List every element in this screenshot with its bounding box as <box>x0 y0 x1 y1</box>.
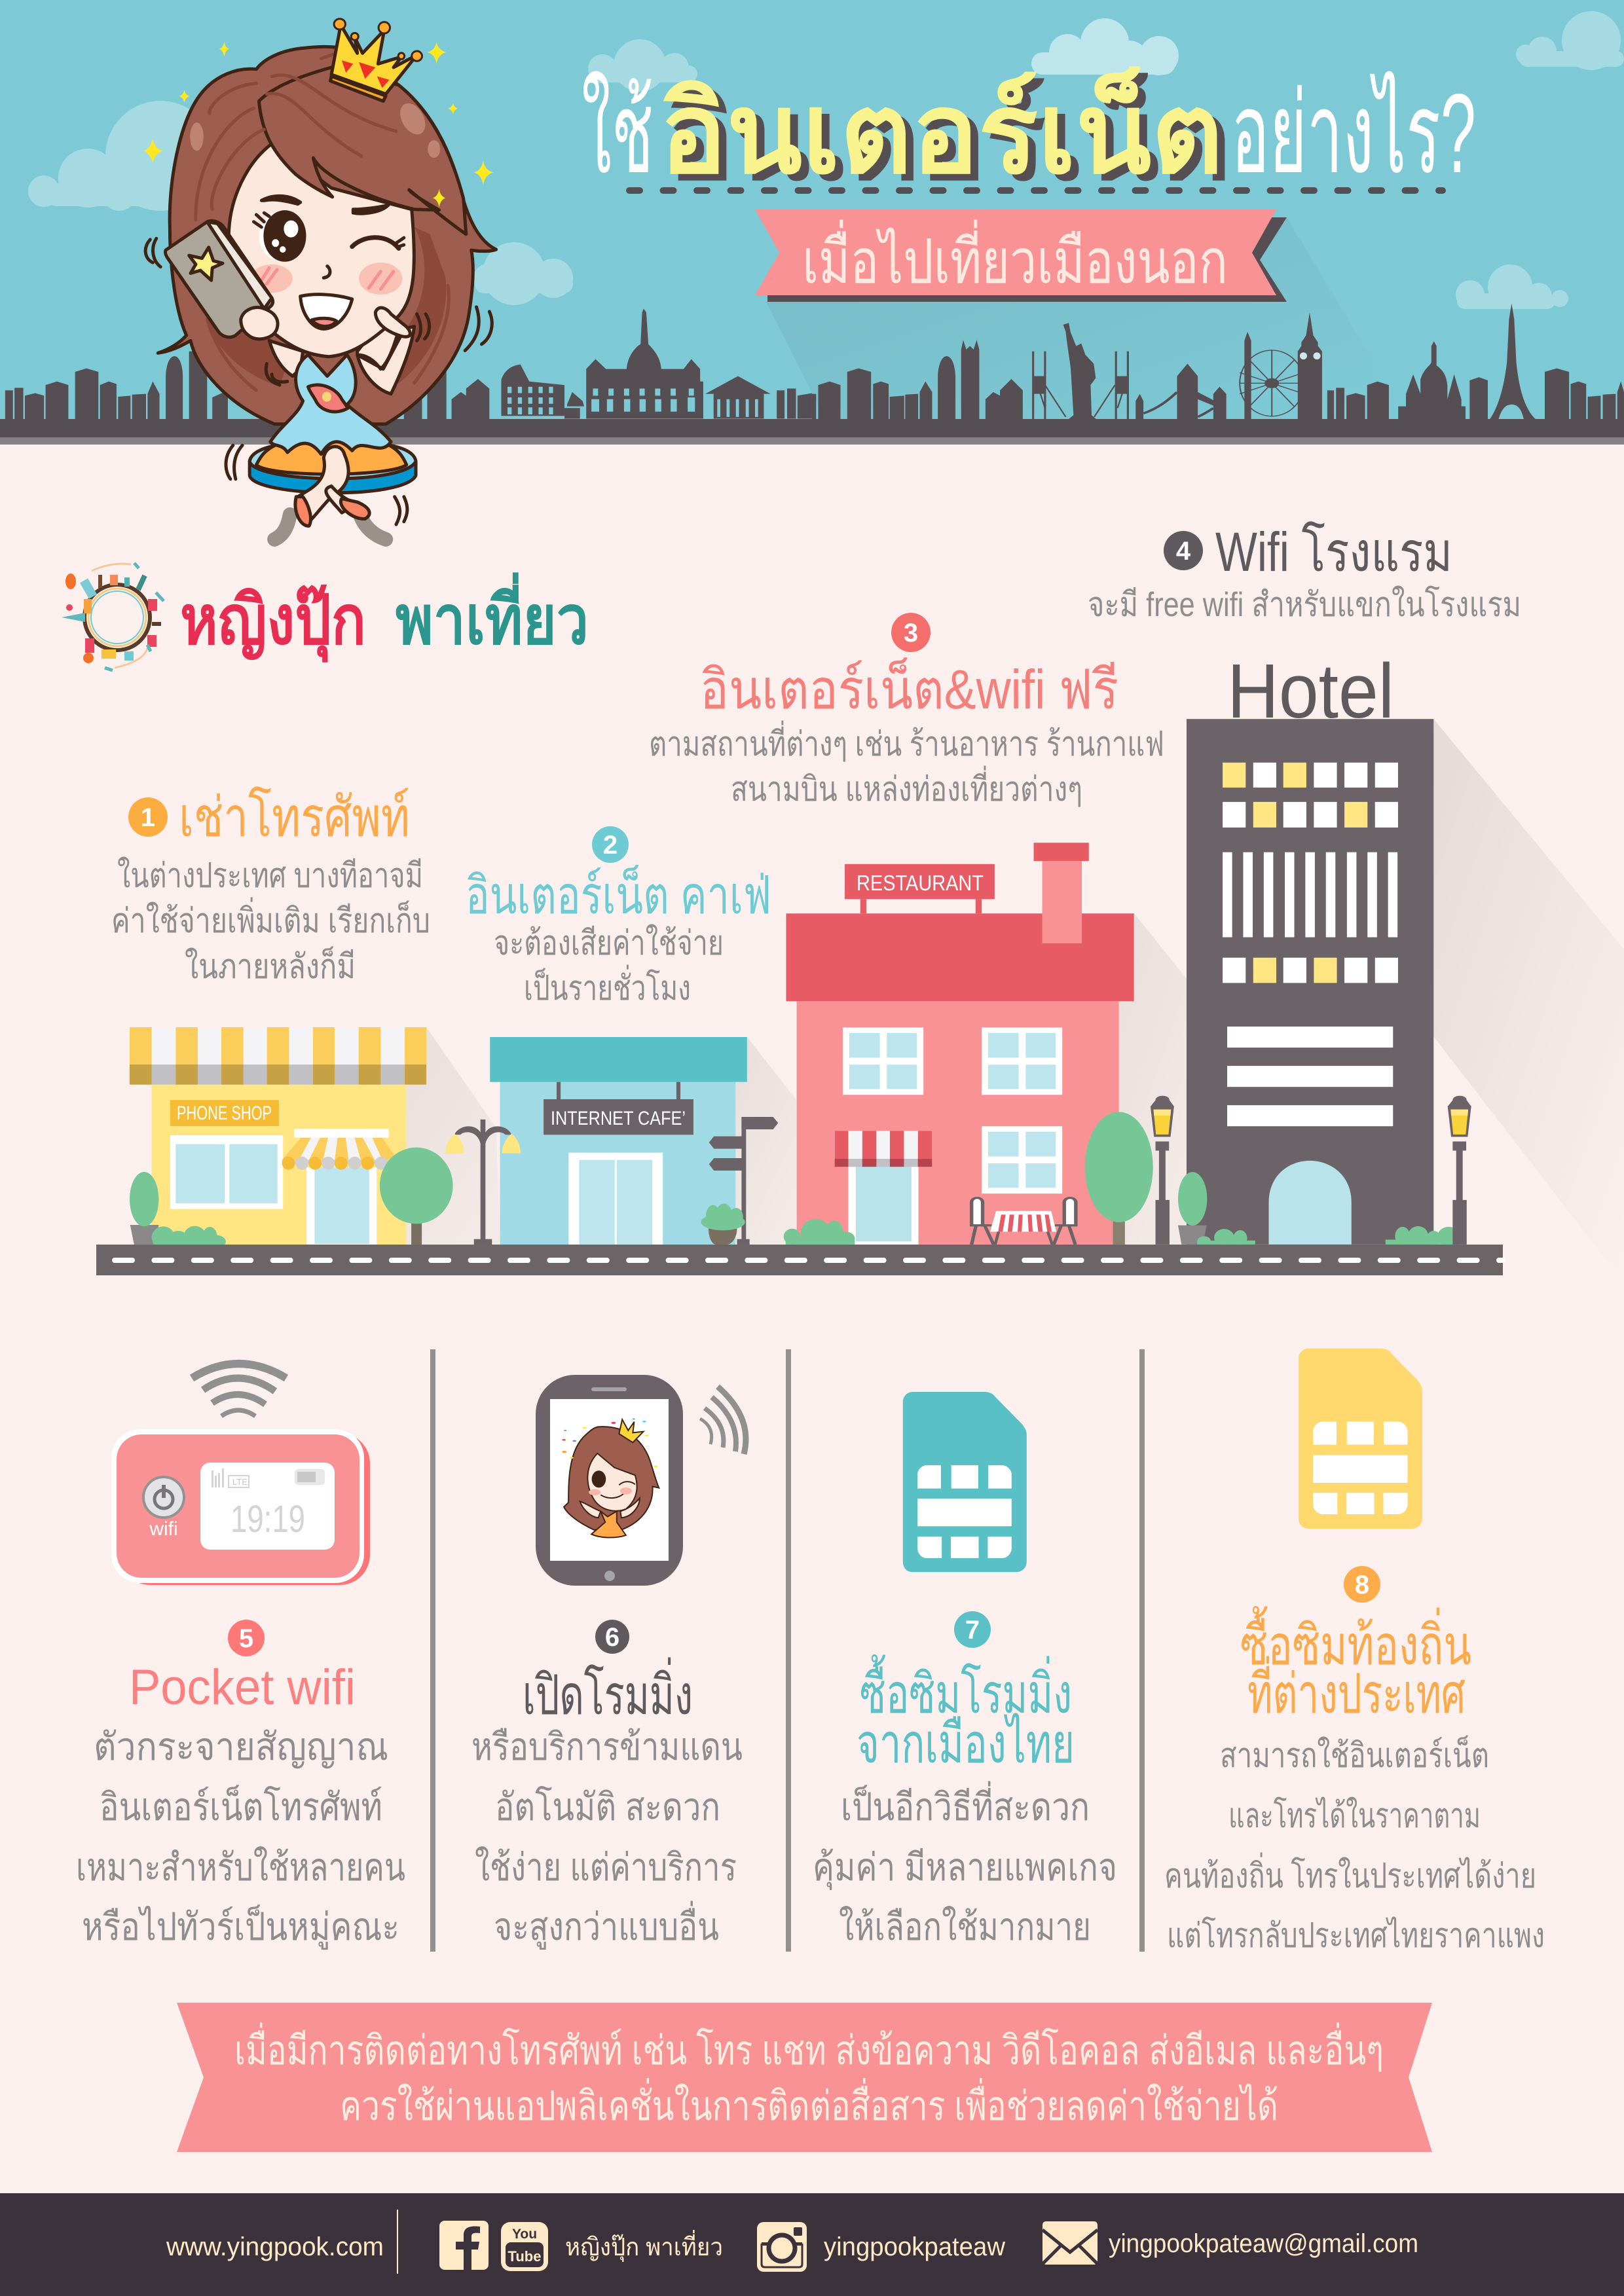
hair highlights <box>190 101 440 158</box>
thai sim title <box>857 1654 1075 1774</box>
roaming description: ใช้ง่าย แต่ค่าบริการ <box>475 1846 737 1889</box>
shop window <box>170 1135 283 1209</box>
shop door <box>306 1167 377 1245</box>
item 4 heading: 4 <box>1176 537 1191 566</box>
logo tagline: พาเที่ยว <box>396 572 589 659</box>
skirt orange <box>256 435 407 474</box>
restaurant sign <box>845 864 995 913</box>
local sim description: และโทรได้ในราคาตาม <box>1228 1796 1481 1835</box>
clock: 19:19 <box>231 1498 305 1540</box>
domed church <box>1398 341 1466 420</box>
icon: smartphone <box>536 1375 683 1586</box>
header sky <box>0 0 1624 426</box>
title highlighted word: อินเตอร์เน็ต <box>660 65 1223 196</box>
signal bars <box>212 1468 224 1487</box>
title <box>581 65 1476 203</box>
road-side shadows <box>406 913 1187 1245</box>
tree <box>1085 1112 1153 1245</box>
local sim title <box>1240 1606 1471 1724</box>
skyline right: buildings and monuments <box>812 303 1624 420</box>
tree <box>380 1148 453 1245</box>
panel: roaming text <box>471 1620 743 1950</box>
item 3 heading <box>649 613 1164 809</box>
thai sim title: จากเมืองไทย <box>857 1713 1075 1774</box>
door canopy <box>282 1129 397 1170</box>
pocket wifi description: เหมาะสำหรับใช้หลายคน <box>76 1846 405 1889</box>
restaurant roof <box>786 913 1134 1001</box>
item 3 heading: 3 <box>904 619 918 647</box>
mouth <box>301 295 352 329</box>
cafe sign <box>544 1082 693 1135</box>
roaming title: เปิดโรมมิ่ง <box>523 1657 693 1726</box>
legs <box>298 446 348 522</box>
crown hearts <box>342 60 390 88</box>
device screen <box>200 1463 335 1550</box>
roaming description <box>471 1726 743 1950</box>
roaming description: หรือบริการข้ามแดน <box>471 1726 743 1768</box>
hotel balconies <box>1227 1027 1393 1126</box>
item 1 heading: ค่าใช้จ่ายเพิ่มเติม เรียกเก็บ <box>111 897 430 940</box>
clouds <box>28 11 1624 309</box>
title word one: ใช้ <box>581 71 654 196</box>
roaming description: จะสูงกว่าแบบอื่น <box>494 1901 719 1950</box>
item 1 heading <box>111 786 430 986</box>
pocket wifi description <box>76 1726 405 1950</box>
domed palace <box>586 309 703 419</box>
icon: instagram <box>757 2222 807 2272</box>
chimney <box>1034 843 1089 943</box>
hotel windows <box>1223 763 1398 983</box>
fringe <box>259 67 466 234</box>
panel: pocket wifi text: 5 <box>239 1624 253 1653</box>
item 4 heading <box>1088 521 1521 624</box>
pocket wifi description: ตัวกระจายสัญญาณ <box>94 1726 388 1768</box>
thai sim title: ซื้อซิมโรมมิ่ง <box>860 1654 1072 1724</box>
icon: wifi signal <box>192 1364 286 1416</box>
local sim title: ซื้อซิมท้องถิ่น <box>1240 1606 1471 1676</box>
nose and blush marks <box>323 266 330 278</box>
ribbon subtitle <box>755 210 1287 302</box>
facebook page name: หญิงปุ๊ก พาเที่ยว <box>565 2230 723 2262</box>
hotel long shadow <box>1433 719 1624 1283</box>
cafe door <box>568 1153 663 1245</box>
panel: roaming text: 6 <box>605 1623 619 1652</box>
phone shop building <box>130 1027 453 1248</box>
ferris wheel <box>1264 378 1279 388</box>
crown <box>331 25 417 94</box>
restaurant awning <box>835 1131 932 1167</box>
dashed divider <box>629 187 1443 194</box>
panel: pocket wifi text <box>76 1620 405 1950</box>
bushes <box>1197 1226 1460 1247</box>
eiffel tower <box>1489 303 1537 420</box>
kiss lips <box>308 385 348 412</box>
street lamps <box>1151 1096 1471 1245</box>
item 1 heading: ในภายหลังก็มี <box>185 947 356 986</box>
icon: youtube <box>501 2222 548 2271</box>
thai sim description: เป็นอีกวิธีที่สะดวก <box>841 1781 1090 1829</box>
panel: local sim text: 8 <box>1355 1571 1369 1599</box>
column dividers <box>430 1349 1145 1952</box>
hands <box>241 308 278 339</box>
shop sign <box>170 1100 279 1126</box>
hotel building <box>1151 719 1471 1247</box>
potted bush <box>701 1203 745 1245</box>
item 4 description: จะมี free wifi สำหรับแขกในโรงแรม <box>1088 585 1521 624</box>
pocket wifi description: หรือไปทัวร์เป็นหมู่คณะ <box>82 1904 399 1950</box>
item 2 title: อินเตอร์เน็ต คาเฟ่ <box>466 864 771 924</box>
bottom banner: ควรใช้ผ่านแอปพลิเคชั่นในการติดต่อสื่อสาร เพื่อช่วยลดค่าใช้จ่ายได้ <box>340 2078 1278 2129</box>
pocket wifi title: Pocket wifi <box>129 1660 356 1715</box>
bush <box>784 1219 855 1247</box>
phone <box>165 221 273 337</box>
road <box>96 1245 1503 1275</box>
icon: yellow sim card <box>1299 1349 1422 1529</box>
icon: facebook <box>439 2221 489 2270</box>
motion lines <box>145 238 492 524</box>
banner text: เมื่อมีการติดต่อทางโทรศัพท์ เช่น โทร แชท ส่งข้อความ วิดีโอคอล ส่งอีเมล และอื่นๆ <box>234 2022 1384 2073</box>
restaurant door <box>848 1167 919 1245</box>
icon: youtube: Tube <box>508 2248 541 2265</box>
item 2 heading: 2 <box>603 831 618 860</box>
restaurant building <box>784 843 1153 1247</box>
local sim description: สามารถใช้อินเตอร์เน็ต <box>1220 1736 1489 1775</box>
hair strands <box>196 53 449 390</box>
big ben <box>1298 312 1322 420</box>
local sim title: ที่ต่างประเทศ <box>1247 1656 1466 1724</box>
shop awning <box>130 1027 426 1085</box>
inner hair shadow <box>207 227 446 387</box>
item 1 title: เช่าโทรศัพท์ <box>179 786 410 848</box>
restaurant sign text: RESTAURANT <box>857 871 984 895</box>
panel: thai roaming sim text <box>813 1611 1117 1948</box>
dress <box>270 355 391 454</box>
stool legs <box>274 515 386 539</box>
cafe sign text: INTERNET CAFE’ <box>551 1108 686 1129</box>
thai sim description: ให้เลือกใช้มากมาย <box>839 1905 1091 1948</box>
ribbon text: เมื่อไปเที่ยวเมืองนอก <box>802 219 1228 296</box>
skyline <box>0 303 1624 437</box>
hotel arched door <box>1268 1161 1352 1245</box>
item 1 heading: 1 <box>141 803 155 832</box>
battery <box>295 1469 325 1485</box>
item 2 heading <box>466 826 771 1008</box>
skyline windows <box>507 387 758 417</box>
item 2 description: จะต้องเสียค่าใช้จ่าย <box>494 924 724 962</box>
item 1 description: ในต่างประเทศ บางทีอาจมี <box>117 856 423 895</box>
skyline left: buildings and monuments <box>5 309 812 420</box>
phone star <box>189 247 223 280</box>
internet cafe building <box>490 1037 778 1246</box>
icon: youtube: You <box>512 2227 537 2242</box>
hair back <box>158 46 496 424</box>
footer <box>0 2193 1624 2296</box>
pocket wifi description: อินเตอร์เน็ตโทรศัพท์ <box>100 1785 382 1829</box>
blush <box>251 264 293 293</box>
panel: thai roaming sim text: 7 <box>965 1616 980 1645</box>
panel: local sim text <box>1164 1566 1545 1955</box>
phone shop sign text: PHONE SHOP <box>177 1102 272 1124</box>
ground strip <box>0 419 1624 437</box>
logo: travel ring <box>62 563 164 670</box>
roaming description: อัตโนมัติ สะดวก <box>495 1785 720 1829</box>
icon: pocket wifi device: LTE <box>232 1477 248 1487</box>
face <box>229 144 414 357</box>
cafe table and chairs <box>970 1198 1077 1245</box>
logo text <box>180 572 589 663</box>
colosseum <box>501 365 564 419</box>
temple <box>705 376 771 419</box>
restaurant windows <box>843 1027 1062 1194</box>
item 3 description: ตามสถานที่ต่างๆ เช่น ร้านอาหาร ร้านกาแฟ <box>649 720 1164 763</box>
item 3 title: อินเตอร์เน็ต&wifi ฟรี <box>700 657 1118 720</box>
ground strip lower <box>0 437 1624 445</box>
hotel sign: Hotel <box>1227 648 1394 735</box>
logo name: หญิงปุ๊ก <box>180 583 366 663</box>
cafe roof <box>490 1037 747 1082</box>
winking eye <box>352 238 399 248</box>
local sim description <box>1164 1736 1545 1955</box>
open eye <box>259 210 306 261</box>
thai sim description <box>813 1781 1117 1948</box>
title: อินเตอร์เน็ต <box>668 72 1231 203</box>
stool cushion <box>249 462 416 493</box>
neck and arms <box>269 319 415 394</box>
suspension bridge <box>1032 352 1046 420</box>
device label: wifi <box>149 1518 178 1540</box>
ribbon long shadow <box>766 217 1369 419</box>
item 3 heading: สนามบิน แหล่งท่องเที่ยวต่างๆ <box>731 765 1082 809</box>
thai sim description: คุ้มค่า มีหลายแพคเกจ <box>813 1846 1117 1891</box>
local sim description: คนท้องถิ่น โทรในประเทศได้ง่าย <box>1164 1852 1536 1895</box>
icon: mail <box>1043 2221 1098 2265</box>
potted cypress <box>130 1172 158 1245</box>
bottom banner <box>177 2003 1432 2152</box>
shoes <box>295 497 310 526</box>
item 2 heading: เป็นรายชั่วโมง <box>524 964 691 1008</box>
icon: teal sim card <box>903 1392 1027 1572</box>
icon: pocket wifi device <box>111 1429 370 1585</box>
power button <box>143 1477 184 1518</box>
website: www.yingpook.com <box>166 2232 384 2261</box>
character: girl on phone <box>143 19 496 539</box>
eyebrows and eyes <box>261 196 388 213</box>
statue of liberty <box>1063 323 1098 420</box>
email: yingpookpateaw@gmail.com <box>1109 2229 1418 2258</box>
instagram handle: yingpookpateaw <box>824 2232 1005 2261</box>
icon: phone signal waves <box>700 1387 746 1454</box>
item 4 title: Wifi โรงแรม <box>1215 521 1452 583</box>
sparkles <box>143 42 494 208</box>
signpost <box>709 1117 778 1246</box>
mini character on screen <box>562 1418 659 1538</box>
bush <box>152 1226 226 1248</box>
potted cypress <box>1178 1172 1207 1245</box>
street lamp double <box>445 1120 521 1246</box>
